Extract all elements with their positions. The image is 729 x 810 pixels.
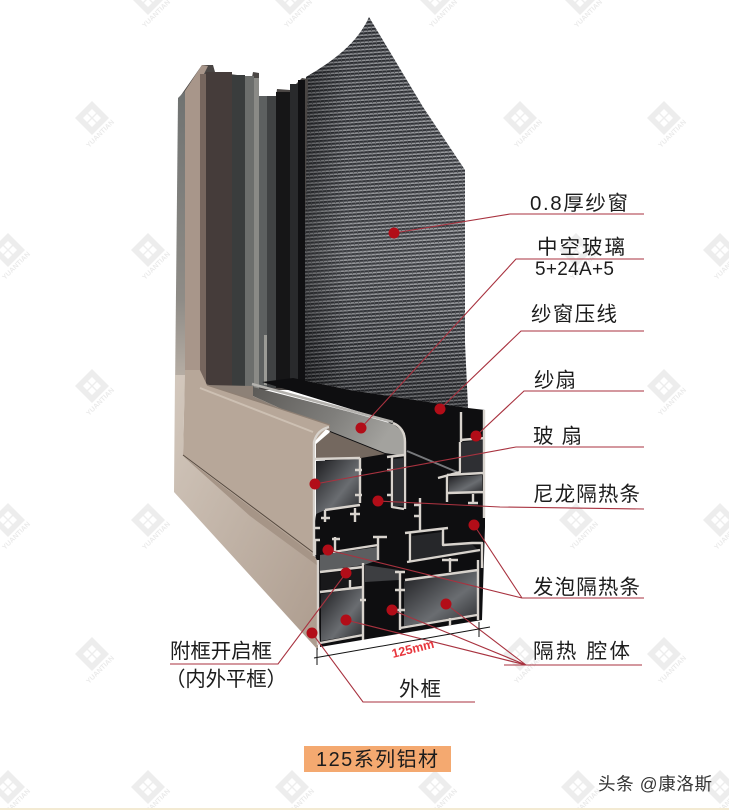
insect mesh screen	[293, 17, 468, 408]
label: screen bead: 纱窗压线	[531, 303, 617, 326]
glass bead top surface	[252, 384, 457, 472]
label: glass sash: 玻 扇	[533, 425, 582, 448]
labels	[165, 192, 640, 701]
lower beige face	[174, 375, 318, 650]
caption badge: 125系列铝材	[316, 748, 438, 771]
label: glass spec: 5+24A+5	[535, 259, 614, 280]
chambers	[316, 440, 483, 641]
red leader lines	[170, 214, 644, 702]
label: insulating glass: 中空玻璃	[537, 236, 625, 259]
dimension 125mm: 125mm	[390, 637, 436, 661]
label: screen: 0.8厚纱窗	[530, 192, 628, 215]
black back wall	[262, 378, 485, 647]
label: auxiliary frame: 附框开启框	[170, 640, 272, 663]
window profile photo	[174, 17, 485, 650]
label: cavity: 隔热 腔体	[533, 640, 630, 663]
source credit: 头条 @康洛斯	[598, 774, 712, 794]
label: screen sash: 纱扇	[534, 369, 576, 392]
label: foam strip: 发泡隔热条	[533, 576, 640, 599]
dimension 125mm	[314, 622, 490, 665]
label: outer frame: 外框	[399, 678, 441, 701]
vertical frame column	[175, 65, 308, 390]
label: nylon strip: 尼龙隔热条	[533, 483, 640, 506]
aluminium section lines	[314, 410, 485, 645]
label: inner outer flush: （内外平框）	[165, 668, 287, 691]
red marker dots	[306, 228, 482, 638]
beige front face	[183, 370, 330, 556]
